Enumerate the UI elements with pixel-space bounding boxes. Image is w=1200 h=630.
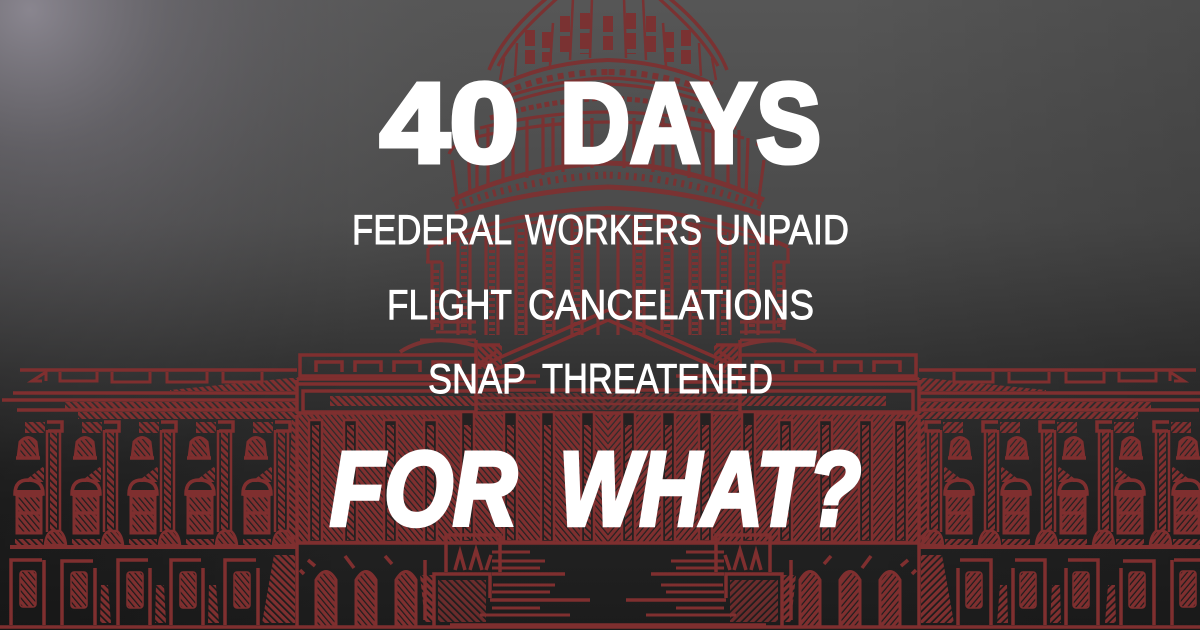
headline: for what: FOR xyxy=(330,431,517,548)
text line: snap threatened: SNAP xyxy=(428,355,526,402)
text line: snap threatened: THREATENED xyxy=(542,355,773,402)
headline: 40 days: DAYS xyxy=(560,60,821,186)
text line: flight cancelations xyxy=(387,281,814,328)
text line: federal workers unpaid: WORKERS xyxy=(525,206,702,253)
text line: flight cancelations: FLIGHT xyxy=(387,281,512,328)
text line: snap threatened xyxy=(428,355,773,402)
headline: 40 days xyxy=(380,60,821,186)
text line: federal workers unpaid: UNPAID xyxy=(715,206,849,253)
headline: 40 days: 40 xyxy=(380,60,519,186)
headline: for what: WHAT? xyxy=(559,431,861,548)
text line: flight cancelations: CANCELATIONS xyxy=(528,281,814,328)
text line: federal workers unpaid: FEDERAL xyxy=(352,206,512,253)
text line: federal workers unpaid xyxy=(352,206,849,253)
headline: for what xyxy=(330,431,861,548)
